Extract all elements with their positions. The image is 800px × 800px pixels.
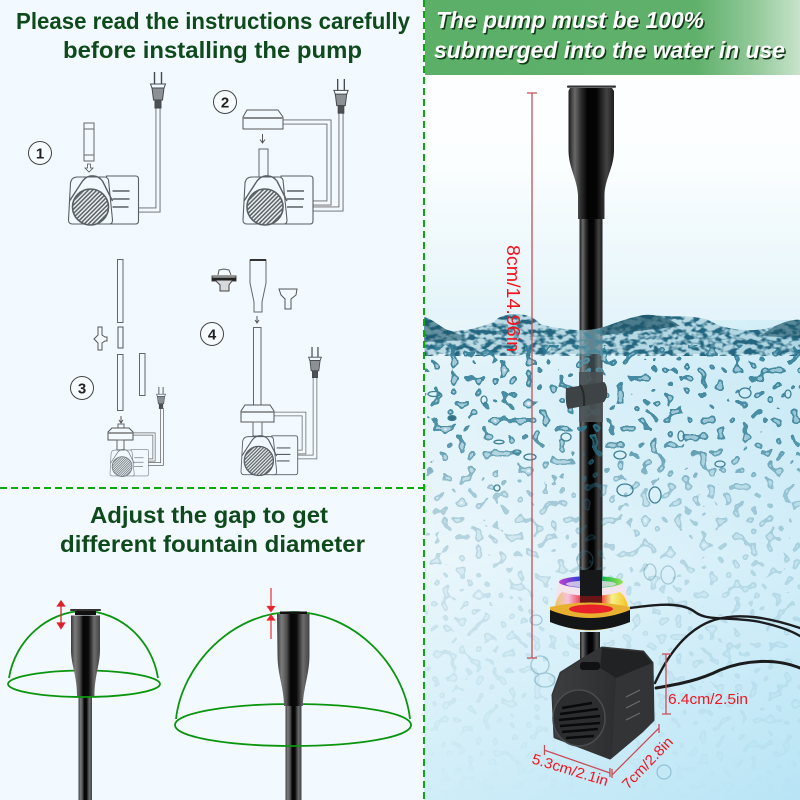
header banner: submerged into the water in use bbox=[434, 37, 785, 63]
cables bbox=[630, 605, 800, 688]
step 1 diagram: 1 bbox=[36, 146, 44, 162]
pump riser tube with nozzle bbox=[567, 86, 616, 604]
dimension: overall height: 8cm/14.96in bbox=[503, 245, 523, 352]
LED ring light bbox=[550, 570, 630, 630]
title: instructions: before installing the pump bbox=[63, 37, 362, 63]
water surface bbox=[424, 314, 800, 744]
adjustment arrow bbox=[58, 601, 64, 628]
title: instructions: Please read the instructions carefully bbox=[16, 8, 410, 34]
dimension: pump height: 6.4cm/2.5in bbox=[668, 692, 748, 708]
header banner bbox=[425, 0, 800, 75]
title: adjust the gap: different fountain diameter bbox=[60, 531, 365, 557]
dimension: pump height bbox=[662, 654, 748, 714]
dashed divider: vertical bbox=[423, 0, 425, 800]
step 2 diagram bbox=[214, 79, 348, 225]
step 3 diagram: 3 bbox=[78, 380, 86, 398]
step 3 diagram bbox=[70, 260, 166, 476]
gap arrows bbox=[268, 588, 274, 639]
dimension: pump depth: 7cm/2.8in bbox=[619, 734, 677, 793]
bubbles bbox=[428, 388, 791, 779]
header banner: The pump must be 100% bbox=[436, 7, 704, 33]
large spray dome bbox=[175, 588, 411, 800]
dimension: pump depth bbox=[612, 724, 677, 793]
title: adjust the gap bbox=[60, 502, 365, 557]
title: adjust the gap: Adjust the gap to get bbox=[90, 502, 328, 528]
header banner: submerged into the water in use bbox=[436, 38, 786, 64]
title: instructions bbox=[16, 8, 410, 63]
header banner: The pump must be 100% bbox=[438, 8, 706, 34]
step 4 diagram: 4 bbox=[208, 326, 217, 344]
step 1 diagram bbox=[28, 72, 166, 225]
step 2 diagram: 2 bbox=[221, 94, 229, 112]
dimension: overall height bbox=[503, 93, 537, 658]
dimension: pump width: 5.3cm/2.1in bbox=[530, 752, 610, 790]
small spray dome bbox=[8, 601, 160, 800]
left background bbox=[0, 0, 424, 800]
submersible pump bbox=[553, 632, 653, 758]
right panel: submerged pump bbox=[424, 0, 800, 800]
dashed divider: horizontal bbox=[0, 487, 424, 489]
valve clamp bbox=[566, 372, 607, 422]
step 4 diagram bbox=[200, 259, 321, 476]
